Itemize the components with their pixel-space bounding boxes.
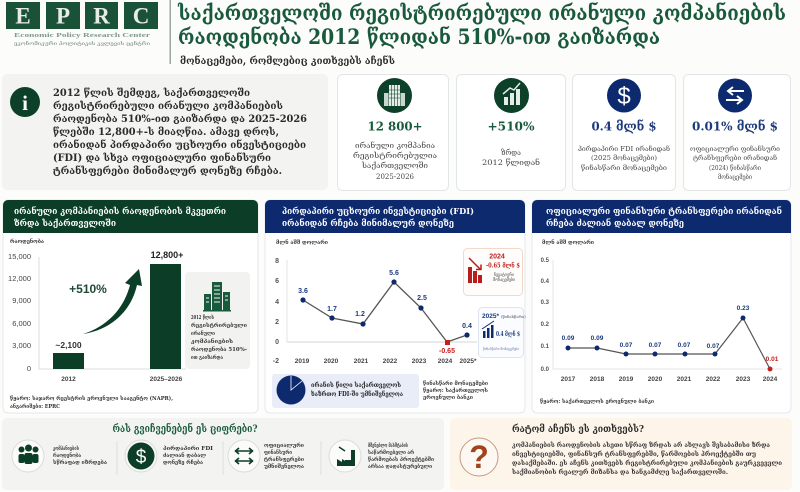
panel heading [532,200,791,233]
callout: რაოდენობა 510%- [191,345,247,353]
item: FDI [125,440,213,472]
line chart: transfers: 2022 [706,376,721,383]
body text: კომპანიების რაოდენობის ასეთი სწრაფ ზრდას არ ახლავს შესაბამისი ზრდა [512,440,770,449]
bar chart: 2025–2026 [150,376,183,383]
panel: FDI line chart: მლნ აშშ დოლარი [276,238,329,246]
item: factory: წარმოებას პროექტებში [368,456,435,463]
callout: 2024: მონაცემები [493,275,515,283]
line chart: transfers: 0.5 [541,258,550,264]
panel heading: რას გვიჩვენებენ ეს ციფრები? [112,422,258,435]
callout: ირანული [191,329,216,337]
line chart: FDI: 2024 [438,358,453,365]
panel: stat card companies [338,74,448,190]
panel: stat card growth [456,74,566,190]
panel heading: რატომ აჩენს ეს კითხვებს? [512,423,644,435]
panel: stat card FDI [572,74,676,190]
body text: საქმიანობის რეალურ მიზანსა და ხანგამძლე საქართველოში. [511,467,728,476]
logo: EPRC: P [56,4,70,28]
panel heading: ოფიციალური ფინანსური ტრანსფერები ირანიდან [546,205,782,217]
callout: 2025: 0.4 მლნ $ [496,330,520,338]
source note: ანგარიშები: EPRC [10,402,61,410]
panel: stat card companies: ირანული კომპანია [355,141,435,150]
panel: stat card FDI: (2025 მონაცემები) [591,153,657,162]
callout [185,272,250,369]
callout: 2025: 2025* [482,313,499,320]
line chart: transfers: 0.07 [678,342,691,349]
bar chart: 9,000 [12,296,31,305]
line chart: transfers: 2021 [677,376,692,383]
panel: stat card FDI: პირდაპირი FDI ირანიდან [578,144,670,153]
bar chart: ~2,100 [55,340,82,350]
panel: company growth chart: რაოდენობა [10,237,44,245]
logo: EPRC: Economic Policy Research Center [14,33,151,39]
line chart: transfers: 0.09 [591,335,604,342]
item: companies: კომპანიების [53,444,79,452]
panel heading: პირდაპირი უცხოური ინვესტიციები (FDI) [282,205,474,217]
line chart: transfers: 0.3 [541,300,550,306]
panel: official transfers chart [532,200,791,413]
callout: რეგისტრირებული [191,322,248,329]
panel: stat card transfers [684,74,790,190]
line chart: transfers: 0.01 [766,356,779,363]
summary text: რაოდენობა 510%-ით გაიზარდა და 2025-2026 [53,112,307,125]
bar chart: 6,000 [12,319,31,328]
summary text: წლებში 12,800+-ს მიაღწია. ამავე დროს, [53,126,279,138]
line chart: FDI: 2022 [383,358,398,365]
callout: 2024: ნეგატიური [494,270,514,278]
line chart: transfers: 2024 [763,376,778,383]
item: transfers: უმნიშვნელოა [264,462,304,470]
bar chart: 12,000 [8,274,31,283]
item: transfers: ოფიციალური [264,442,305,449]
bar chart: 12,800+ [151,250,183,260]
line chart: FDI: 8 [275,258,279,265]
bar chart: 15,000 [8,252,31,261]
icon: info: i [22,91,28,115]
callout: 2025: წინასწარი მონაცემები [483,346,520,351]
summary text: 2012 წლის შემდეგ, საქართველოში [53,87,250,99]
body text: ინვესტიციებში, ფინანსურ ტრანსფერებში, წარმოების პროექტებში თუ [512,449,756,458]
summary text: ტრანსფერები მინიმალურ დონეზე რჩება. [53,164,282,177]
panel: stat card transfers: ოფიციალური ფინანსური [690,144,780,153]
panel: stat card transfers: მონაცემები [718,172,752,181]
line chart: transfers: 0.2 [541,322,550,328]
line chart: transfers: 0.4 [541,279,550,285]
item: transfers [228,440,305,472]
line chart: FDI: 6 [275,278,279,285]
icon: info [10,87,40,117]
body text: დასაქმებაში. ეს აჩენს კითხვებს რეგისტრირებული კომპანიების გაურკვეველი [512,458,782,467]
item: factory: მშენებლო მასშტაბის [368,441,408,449]
panel heading: ირანული კომპანიების რაოდენობის მკვეთრი [14,205,226,217]
callout: 2024: -0.65 მლნ $ [486,262,520,270]
line chart: FDI [273,258,477,365]
panel: stat card companies: 12 800+ [368,118,422,134]
icon: buildings [377,78,412,113]
line chart: FDI: 2.5 [417,295,427,302]
logo: EPRC: C [133,4,149,28]
panel: stat card transfers: 0.01% მლნ $ [692,118,778,134]
line chart: transfers: 0.1 [541,344,550,350]
line chart: transfers: 0.07 [649,342,662,349]
line chart: transfers: 2019 [619,376,634,383]
line chart: FDI: 2025* [460,358,477,365]
panel: stat card FDI: წინასწარი მონაცემები [581,163,667,172]
line chart: FDI: 2021 [354,358,369,365]
item: FDI: პირდაპირი FDI [163,445,213,452]
item: FDI: დონეზე რჩება [163,458,203,466]
icon: growth chart [494,78,529,113]
bar chart [8,250,186,383]
item: transfers: ფინანსური [264,448,293,456]
icon: question mark: ? [469,439,489,475]
icon: dollar: $ [617,83,631,110]
panel: stat card companies: საქართველოში [361,162,428,170]
logo: EPRC: E [15,4,31,28]
arrow [83,269,142,334]
line chart: FDI: 1.7 [327,306,337,313]
line chart: transfers [541,258,782,383]
panel heading: რჩება ძალიან დაბალ დონეზე [546,217,684,229]
item: companies: სწრაფად იზრდება [52,459,107,466]
line chart: FDI: 2 [275,319,279,326]
logo: EPRC [6,2,158,47]
item: FDI: ძალიან დაბალ [163,451,206,459]
line chart: transfers: 2020 [648,376,663,383]
panel: stat card transfers: (2024) წინასწარი [709,163,761,172]
line chart: transfers: 0.07 [707,343,720,350]
line chart: FDI: 1.2 [355,311,365,318]
item: factory: არსაა დადასტურებული [368,463,433,470]
panel: stat card growth: ზრდა [501,149,521,157]
source note: ეროვნული ბანკი [423,393,474,401]
panel: FDI line chart [265,200,526,413]
icon: building [203,282,231,312]
line chart: transfers: 0.0 [541,367,550,373]
line chart: FDI: -2 [273,358,279,365]
callout: 2025: (წინასწარი) [501,314,526,319]
logo: EPRC: R [93,4,110,28]
line chart: FDI: 5.6 [389,270,399,277]
line chart: transfers: 2018 [590,376,605,383]
summary text: (FDI) და სხვა ოფიციალური ფინანსური [53,151,271,164]
subtitle: მონაცემები, რომლებიც კითხვებს აჩენს [180,54,395,67]
header divider [170,0,171,64]
callout: share of FDI: ირანის წილი საქართველოს [311,381,401,389]
panel: stat card companies: 2025-2026 [376,173,415,181]
item: factory [329,440,435,472]
line chart: FDI: -0.65 [439,348,455,355]
line chart: FDI: 4 [275,299,279,306]
panel: official transfers chart: მლნ აშშ დოლარი [542,238,595,246]
icon: pie chart [276,376,306,404]
item: FDI: $ [136,447,147,468]
callout: 2012 წლის [191,314,214,321]
callout: კომპანიების [191,337,233,345]
callout: 2024: 2024 [489,254,505,260]
line chart: FDI: 2020 [324,358,339,365]
line chart: transfers: 2017 [561,376,576,383]
callout: ით გაიზარდა [191,354,223,361]
panel: company growth chart [3,200,258,413]
bar chart: 2012 [61,376,76,383]
line chart: FDI: 2023 [412,358,427,365]
panel: stat card FDI: 0.4 მლნ $ [592,118,656,134]
panel: stat card companies: რეგისტრირებულია [353,152,437,160]
panel: stat card growth: 2012 წლიდან [482,158,540,167]
panel heading: ირანიდან რჩება მინიმალურ დონეზე [282,217,454,229]
item: factory: საწარმოებელი არ [367,449,414,456]
line chart: FDI: 0.4 [462,323,472,330]
line chart: transfers: 2023 [736,376,751,383]
dividers [117,441,321,475]
panel heading [265,200,525,233]
item: companies [12,440,107,472]
summary text: რეგისტრირებული ირანული კომპანიების [53,99,283,112]
source note: წყარო: საქართველოს [423,387,488,394]
line chart: FDI: 2019 [295,358,310,365]
line chart: FDI: 0 [275,339,279,346]
panel heading [3,200,258,233]
source note [423,379,489,401]
panel: stat card growth: +510% [488,118,535,134]
callout: 2024 [464,248,522,296]
line chart: transfers: 0.09 [562,335,575,342]
bar chart: +510% [69,282,107,296]
line chart: transfers: 0.07 [620,342,633,349]
callout: share of FDI: ხაზრთო FDI-ში უმნიშვნელოა [310,390,403,398]
item: companies: რაოდენობა [53,451,81,459]
body text [511,440,782,476]
panel: summary [2,74,328,190]
source note: წყარო: საჯარო რეესტრის ეროვნული სააგენტო (NAPR), [10,394,173,402]
line chart: FDI: 3.6 [298,288,308,295]
panel: stat card transfers: ტრანსფერები ირანიდან [693,153,777,162]
logo: EPRC: ეკონომიკური პოლიტიკის კვლევის ცენტრი [14,39,151,47]
line chart: transfers: 0.23 [737,305,750,312]
panel: why it raises questions [450,418,792,490]
source note [10,394,173,410]
panel heading: ზრდა საქართველოში [14,218,116,229]
title [177,0,786,49]
bar chart: 3,000 [12,341,31,350]
icon: question mark [460,438,498,476]
callout: share of FDI [272,374,419,408]
source note: წყარო: საქართველოს ეროვნული ბანკი [540,397,655,405]
bar chart: 0 [27,364,31,373]
title: რაოდენობა 2012 წლიდან 510%-ით გაიზარდა [178,24,660,49]
item: transfers: ტრანსფერები [264,455,305,463]
panel: what do the numbers show [2,418,444,490]
summary text: ირანიდან პირდაპირი უცხოური ინვესტიციები [53,138,306,151]
icon: transfer arrows [718,78,752,112]
source note: წინასწარი მონაცემები [423,379,489,387]
callout: 2025 [478,308,526,358]
summary text [53,87,307,177]
